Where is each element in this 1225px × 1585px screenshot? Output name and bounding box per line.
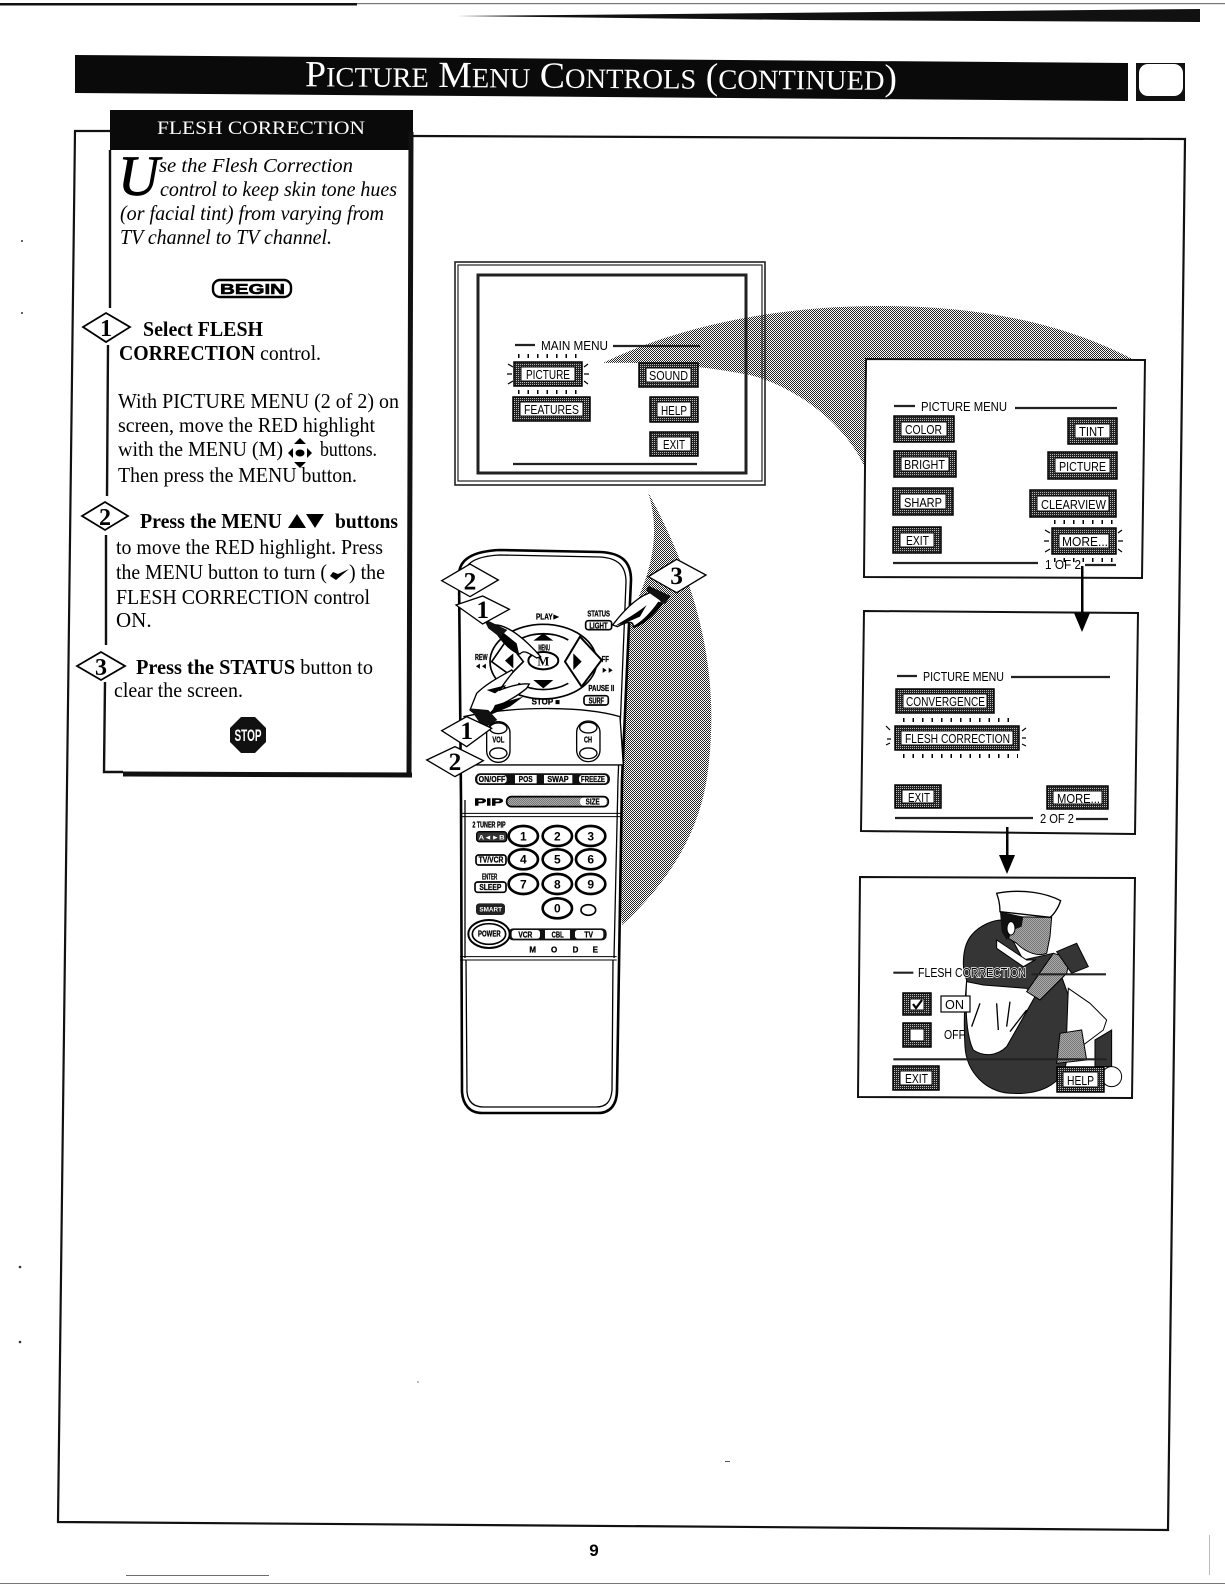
power and mode keys: CBL [552,930,564,939]
number keys: 5 [554,853,561,867]
step 3: clear the screen. [114,678,243,702]
number keys: 7 [520,877,527,891]
intro text: U [118,145,163,208]
illustration: sailor [963,891,1122,1094]
panel: picture menu 2 of 2: 2 OF 2 [1040,811,1074,826]
remote upper controls: SURF [589,696,604,705]
pip buttons: PIP [474,797,504,808]
step 2 [82,502,398,632]
button: help [1057,1067,1104,1092]
pip buttons: POS [519,775,533,784]
pip buttons [474,773,610,808]
panel: picture menu 2 of 2: PICTURE MENU [923,669,1004,684]
pip buttons: SWAP [547,775,569,784]
button: exit: EXIT [908,790,930,805]
marker: 3: 3 [670,562,683,590]
hand: step 1 upper [483,618,541,658]
marker: 1 lower [442,717,492,747]
marker: 1 upper: 1 [476,596,489,624]
step 1: Select FLESH [143,317,263,341]
step 2: the MENU button to turn ( [116,560,327,584]
begin badge [213,280,291,298]
step 1: Then press the MENU button. [118,463,357,487]
button: clearview [1030,490,1116,517]
remote lower controls: 2 TUNER PIP [472,821,506,830]
number keys: 1 [520,829,527,843]
button: convergence [896,689,994,713]
step 3: Press the STATUS button to [136,655,373,679]
button: features [513,397,590,421]
button: tint: TINT [1079,424,1104,439]
icon: stop sign: STOP [234,726,262,745]
title bar [75,54,1128,101]
step 2: buttons [335,509,398,533]
power and mode keys: POWER [478,930,501,939]
hand: step 3 [613,586,671,628]
remote upper controls [462,610,623,808]
marker: 2 lower: 2 [449,748,461,776]
button: help: HELP [661,403,687,418]
panel: main menu screen [455,262,765,485]
button: picture highlighted [507,356,589,392]
remote upper controls: PLAY [536,612,553,621]
step 2: to move the RED highlight. Press [116,535,383,559]
button: more highlighted [1044,522,1123,560]
button: exit [895,785,941,808]
remote upper controls: STATUS [587,610,610,619]
button: exit: EXIT [663,437,685,452]
step 3: 3 [95,655,107,681]
remote upper controls: STOP ■ [532,697,560,706]
button: sound: SOUND [649,368,688,383]
panel borders [104,150,123,772]
step 2: ON. [116,608,152,632]
power and mode keys [468,920,607,954]
button: picture [1048,452,1117,479]
panel: picture menu 1 of 2: PICTURE MENU [921,399,1007,414]
direction pad [490,624,602,699]
button: exit [893,527,941,553]
source keys [475,832,507,915]
number keys: 2 [554,829,561,843]
button: help: HELP [1067,1073,1094,1088]
panel header: FLESH CORRECTION [157,118,365,139]
button: exit: EXIT [906,533,929,548]
step 1: 1 [100,316,112,342]
button: exit [893,1066,939,1090]
button: convergence: CONVERGENCE [906,694,985,709]
button: color: COLOR [905,422,942,437]
remote upper controls: ◄◄ [475,662,487,671]
source keys: SLEEP [479,883,502,892]
icon: menu arrows [288,438,312,468]
button: sound [639,363,698,387]
title bar: PICTURE MENU CONTROLS (CONTINUED) [305,54,897,99]
power and mode keys: E [593,945,599,954]
checkbox: off: OFF [944,1027,965,1042]
step 1: with the MENU (M) [118,437,283,461]
button: exit [650,432,698,456]
pointing hands and step markers [427,559,706,777]
power and mode keys: TV [584,930,594,939]
button: clearview: CLEARVIEW [1041,497,1107,512]
step 2: FLESH CORRECTION control [116,585,370,609]
button: exit: EXIT [905,1071,928,1086]
remote control [427,550,706,1113]
number keys: 4 [520,853,527,867]
number keys: 0 [554,902,561,916]
panel: flesh correction instructions [77,110,413,776]
direction pad: M [537,654,549,668]
begin badge: BEGIN [220,281,285,298]
number keys: 3 [587,829,594,843]
remote upper controls: REW [475,653,488,662]
button: sharp [893,488,953,515]
button: picture: PICTURE [1059,459,1106,474]
step 2: ) the [349,560,385,584]
pip buttons: ON/OFF [479,775,505,784]
panel: flesh correction screen [858,877,1135,1098]
number keys: 8 [554,877,561,891]
button: flesh correction highlighted [886,720,1026,756]
remote upper controls: PAUSE II [588,684,614,693]
panel: picture menu 2 of 2 [861,611,1138,834]
highlight beam: main menu to picture menu [603,306,1136,470]
step 1: buttons. [320,437,377,461]
step 2: Press the MENU [140,509,282,533]
marker: 2 upper [442,564,498,597]
top scan edge line [0,3,1225,6]
power and mode keys: VCR [518,930,533,939]
direction pad: MENU [538,644,550,653]
number keys: 6 [587,853,594,867]
arrow: picture menu 2 to flesh correction [999,827,1015,874]
step 1: screen, move the RED highlight [118,413,375,437]
remote upper controls: ►► [602,666,614,675]
button: picture highlighted: PICTURE [526,367,570,382]
checkbox: on [903,993,970,1015]
source keys: A◄►B [479,834,505,841]
source keys: ENTER [482,872,497,881]
intro text: (or facial tint) from varying from [120,201,384,225]
power and mode keys: O [551,945,557,954]
hand: step 1 lower [470,670,529,728]
marker: 1 upper [456,596,509,624]
icon: stop sign [230,717,266,753]
marker: 1 lower: 1 [460,717,473,745]
step 1: With PICTURE MENU (2 of 2) on [118,389,399,413]
number keys [509,826,605,918]
power and mode keys: D [573,945,579,954]
panel: main menu screen: MAIN MENU [541,338,608,353]
button: color [894,416,954,442]
step 1 [83,313,399,487]
button: more highlighted: MORE... [1062,534,1108,549]
panel: picture menu 1 of 2 [864,359,1145,578]
button: tint [1068,418,1117,444]
intro text: control to keep skin tone hues [160,177,397,201]
step 1: CORRECTION control. [119,341,321,365]
step 3 [77,652,373,702]
source keys: TV/VCR [479,856,504,865]
remote lower controls [460,813,622,960]
remote upper controls: FF [602,655,609,664]
volume and channel section: VOL [492,736,504,745]
page number: 9 [589,1541,599,1560]
button: help [650,397,698,422]
button: more: MORE... [1057,791,1100,806]
button: sharp: SHARP [904,495,942,510]
checkbox: off [903,1023,965,1047]
panel: flesh correction screen: FLESH CORRECTION [918,965,1026,980]
icon: tv tab [1136,63,1185,101]
pip buttons: SIZE [586,798,600,807]
intro text: se the Flesh Correction [159,155,353,177]
button: flesh correction highlighted: FLESH CORRECTION [905,731,1010,746]
highlight beam: remote to main menu [600,492,711,925]
source keys: SMART [479,907,502,914]
volume and channel section [462,709,623,765]
marker: 2 upper: 2 [464,567,476,595]
number keys: 9 [587,877,594,891]
remote upper controls: LIGHT [589,621,608,630]
intro text [118,145,397,249]
panel: picture menu 1 of 2: 1 OF 2 [1045,557,1081,572]
step 2: 2 [99,505,111,531]
button: bright [894,451,956,477]
volume and channel section: CH [584,736,592,745]
power and mode keys: M [529,945,536,954]
marker: 2 lower [427,747,483,777]
checkbox: on: ON [945,997,964,1012]
intro text: TV channel to TV channel. [120,225,332,249]
arrow: picture menu 1 to 2 [1074,566,1090,632]
panel header [110,110,413,150]
button: features: FEATURES [524,402,579,417]
top black bar [457,9,1200,22]
button: more [1047,786,1108,809]
marker: 3 [648,559,706,593]
button: bright: BRIGHT [904,457,945,472]
pip buttons: FREEZE [581,775,605,784]
